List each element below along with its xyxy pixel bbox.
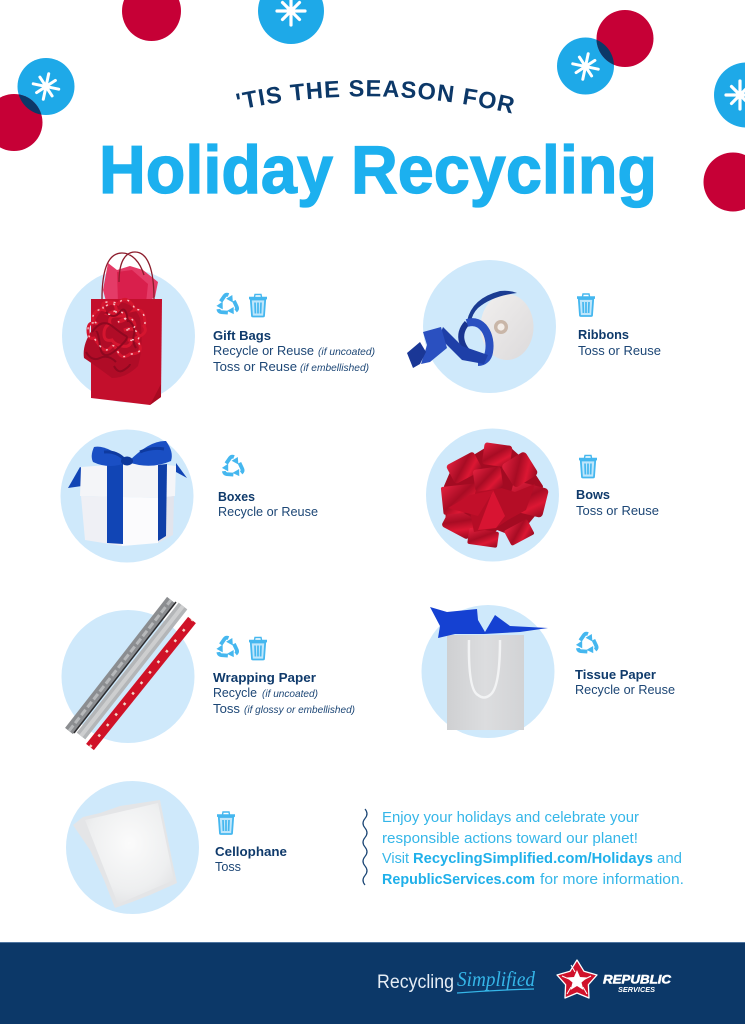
text: tissue paper: Recycle or Reuse — [575, 682, 675, 697]
text: ribbons: Ribbons — [578, 327, 629, 342]
image: red gift bag — [84, 252, 162, 405]
icon: trash — [217, 812, 235, 834]
text: wrapping paper: Wrapping Paper — [213, 670, 316, 685]
icon: trash — [577, 294, 595, 316]
curved subtitle: 'TIS THE SEASON FOR — [236, 80, 514, 114]
logo: Republic Services: SERVICES — [618, 987, 655, 994]
text: gift bags: Toss or Reuse — [213, 359, 297, 374]
text: cellophane — [215, 844, 287, 874]
closing message: for more information. — [540, 872, 684, 888]
text: gift bags: Recycle or Reuse — [213, 343, 314, 358]
text: tissue paper — [575, 667, 675, 697]
text: gift bags: (if uncoated) — [318, 346, 375, 358]
closing message: responsible actions toward our planet! — [382, 831, 638, 847]
text: wrapping paper: (if glossy or embellished) — [244, 704, 355, 716]
text: ribbons — [578, 327, 661, 358]
closing message — [382, 810, 684, 888]
text: bows: Toss or Reuse — [576, 503, 659, 518]
icon: trash — [579, 456, 597, 478]
logo: Recycling Simplified: Recycling — [377, 972, 454, 993]
icon: recycle — [216, 295, 240, 316]
closing message: RepublicServices.com — [382, 872, 535, 888]
text: cellophane: Cellophane — [215, 844, 287, 859]
closing message: and — [657, 851, 682, 867]
logo: Recycling Simplified — [377, 967, 535, 993]
text: bows — [576, 487, 659, 518]
panel: gift bags — [62, 252, 375, 405]
image: red bow — [441, 442, 549, 548]
panel: ribbons — [407, 260, 661, 393]
icon: recycle — [216, 638, 240, 659]
panel: tissue paper — [422, 605, 675, 738]
logo: Republic Services: REPUBLIC — [603, 974, 672, 986]
text: wrapping paper — [213, 670, 355, 716]
text: wrapping paper: (if uncoated) — [262, 688, 318, 700]
text: gift bags: Gift Bags — [213, 328, 271, 343]
panel: boxes — [60, 430, 318, 562]
text: wrapping paper: Recycle — [213, 685, 257, 700]
footer band — [0, 942, 745, 1024]
panel: cellophane — [66, 781, 287, 914]
title: Holiday Recycling — [99, 132, 657, 208]
closing message: Visit — [382, 851, 409, 867]
text: ribbons: Toss or Reuse — [578, 343, 661, 358]
text: boxes: Boxes — [218, 489, 255, 504]
icon: trash — [249, 638, 267, 660]
text: boxes — [218, 489, 318, 519]
closing message: Enjoy your holidays and celebrate your — [382, 810, 639, 826]
image: blue ribbon spool — [407, 291, 534, 368]
icon: recycle — [221, 457, 245, 478]
text: gift bags — [213, 328, 375, 374]
image: white gift box with blue ribbon — [68, 441, 187, 546]
closing message: RecyclingSimplified.com/Holidays — [413, 851, 653, 867]
text: boxes: Recycle or Reuse — [218, 504, 318, 519]
wavy divider — [363, 809, 367, 885]
panel: wrapping paper — [62, 600, 355, 747]
text: bows: Bows — [576, 487, 610, 502]
text: cellophane: Toss — [215, 859, 241, 874]
panel: bows — [426, 428, 659, 562]
icon: recycle — [575, 634, 599, 655]
image: white bag with blue tissue — [430, 607, 548, 730]
text: wrapping paper: Toss — [213, 701, 241, 716]
text: gift bags: (if embellished) — [300, 362, 369, 374]
image: cellophane sheets — [73, 800, 177, 908]
image: wrapping paper rolls — [69, 600, 192, 747]
text: tissue paper: Tissue Paper — [575, 667, 656, 682]
decorative circles and snowflakes — [0, 0, 745, 212]
icon: trash — [249, 294, 267, 316]
logo: Recycling Simplified: Simplified — [457, 967, 535, 991]
logo: Republic Services — [557, 960, 672, 998]
